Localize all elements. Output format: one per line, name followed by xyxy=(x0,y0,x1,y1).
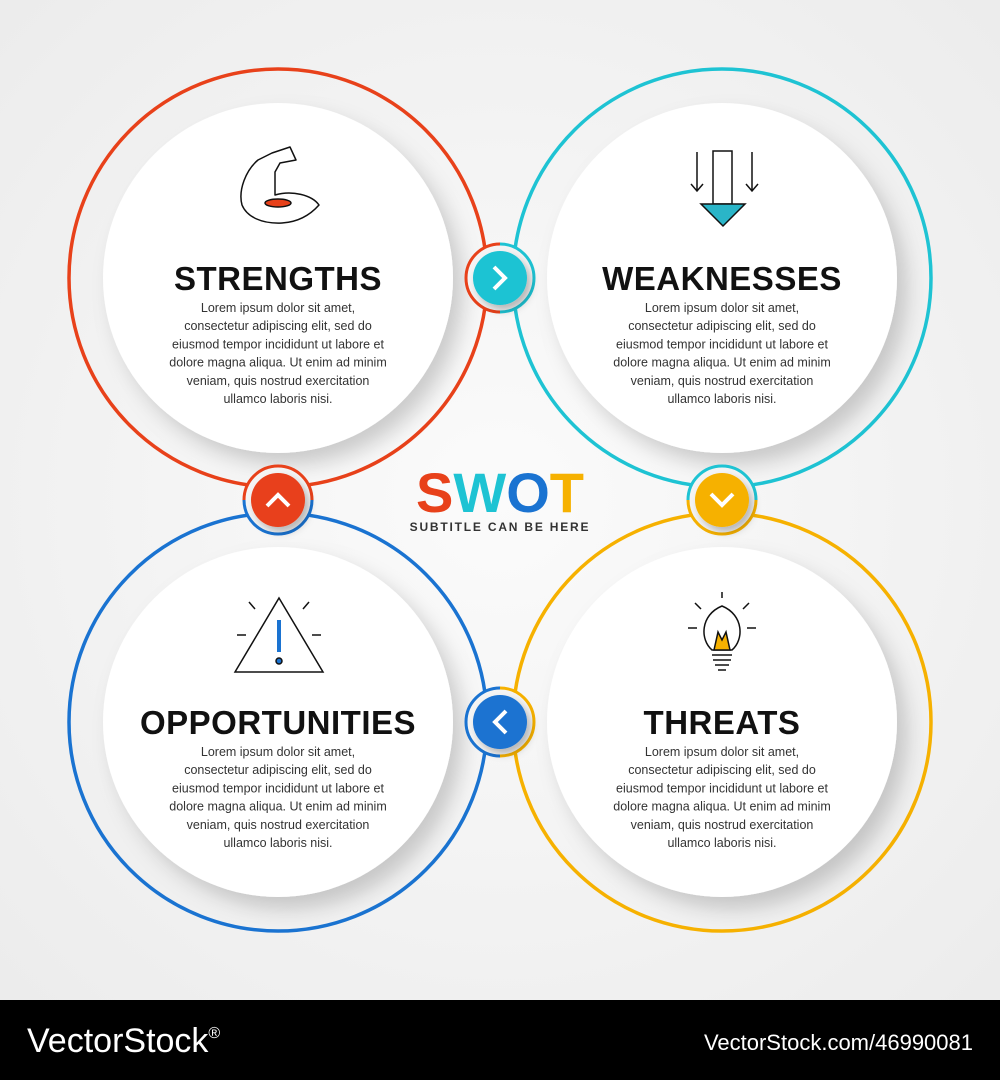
icon: light bulb xyxy=(688,592,756,670)
panel: weaknesses disc xyxy=(547,103,897,453)
text block: strengths: ullamco laboris nisi. xyxy=(223,392,333,406)
text block: opportunities: veniam, quis nostrud exercitation xyxy=(187,818,369,832)
connector: left arrow xyxy=(466,688,534,756)
text block: strengths: dolore magna aliqua. Ut enim ad minim xyxy=(169,356,387,370)
heading: weaknesses: WEAKNESSES xyxy=(602,260,842,297)
text block: weaknesses: Lorem ipsum dolor sit amet, xyxy=(645,301,799,315)
connector: up arrow xyxy=(244,466,312,534)
text block: opportunities: Lorem ipsum dolor sit amet, xyxy=(201,745,355,759)
text block: strengths: veniam, quis nostrud exercitation xyxy=(187,374,369,388)
text block: weaknesses: eiusmod tempor incididunt ut labore et xyxy=(616,337,828,351)
text block: weaknesses: veniam, quis nostrud exercitation xyxy=(631,374,813,388)
footer bar: ® xyxy=(208,1025,220,1042)
text block: strengths: Lorem ipsum dolor sit amet, xyxy=(201,301,355,315)
text block: threats: dolore magna aliqua. Ut enim ad minim xyxy=(613,800,831,814)
text block: opportunities: ullamco laboris nisi. xyxy=(223,836,333,850)
subtitle: SUBTITLE CAN BE HERE xyxy=(410,520,590,534)
title: SWOT: SWOT xyxy=(416,461,584,524)
text block: opportunities: eiusmod tempor incididunt ut labore et xyxy=(172,781,384,795)
text block: threats: veniam, quis nostrud exercitation xyxy=(631,818,813,832)
text block: threats: consectetur adipiscing elit, sed do xyxy=(628,763,816,777)
ring: strengths xyxy=(69,69,487,487)
heading: threats: THREATS xyxy=(644,704,800,741)
text block: threats: ullamco laboris nisi. xyxy=(667,836,777,850)
text block: strengths: eiusmod tempor incididunt ut labore et xyxy=(172,337,384,351)
connector: right arrow xyxy=(466,244,534,312)
text block: opportunities: dolore magna aliqua. Ut enim ad minim xyxy=(169,800,387,814)
icon: warning xyxy=(235,598,323,672)
ring: threats xyxy=(513,513,931,931)
heading: opportunities: OPPORTUNITIES xyxy=(140,704,416,741)
text block: strengths: consectetur adipiscing elit, sed do xyxy=(184,319,372,333)
text block: weaknesses: consectetur adipiscing elit, sed do xyxy=(628,319,816,333)
text block: threats: eiusmod tempor incididunt ut labore et xyxy=(616,781,828,795)
text block: opportunities: consectetur adipiscing elit, sed do xyxy=(184,763,372,777)
text block: weaknesses: dolore magna aliqua. Ut enim ad minim xyxy=(613,356,831,370)
heading: strengths: STRENGTHS xyxy=(174,260,382,297)
icon: down arrow xyxy=(691,151,758,226)
icon: flexed arm xyxy=(241,147,319,223)
footer bar: VectorStock xyxy=(27,1022,208,1060)
panel: threats disc xyxy=(547,547,897,897)
footer bar xyxy=(0,1000,1000,1080)
ring: weaknesses xyxy=(513,69,931,487)
text block: threats: Lorem ipsum dolor sit amet, xyxy=(645,745,799,759)
connector: down arrow xyxy=(688,466,756,534)
panel: strengths disc xyxy=(103,103,453,453)
panel: opportunities disc xyxy=(103,547,453,897)
ring: opportunities xyxy=(69,513,487,931)
footer bar: VectorStock.com/46990081 xyxy=(704,1030,973,1055)
text block: weaknesses: ullamco laboris nisi. xyxy=(667,392,777,406)
